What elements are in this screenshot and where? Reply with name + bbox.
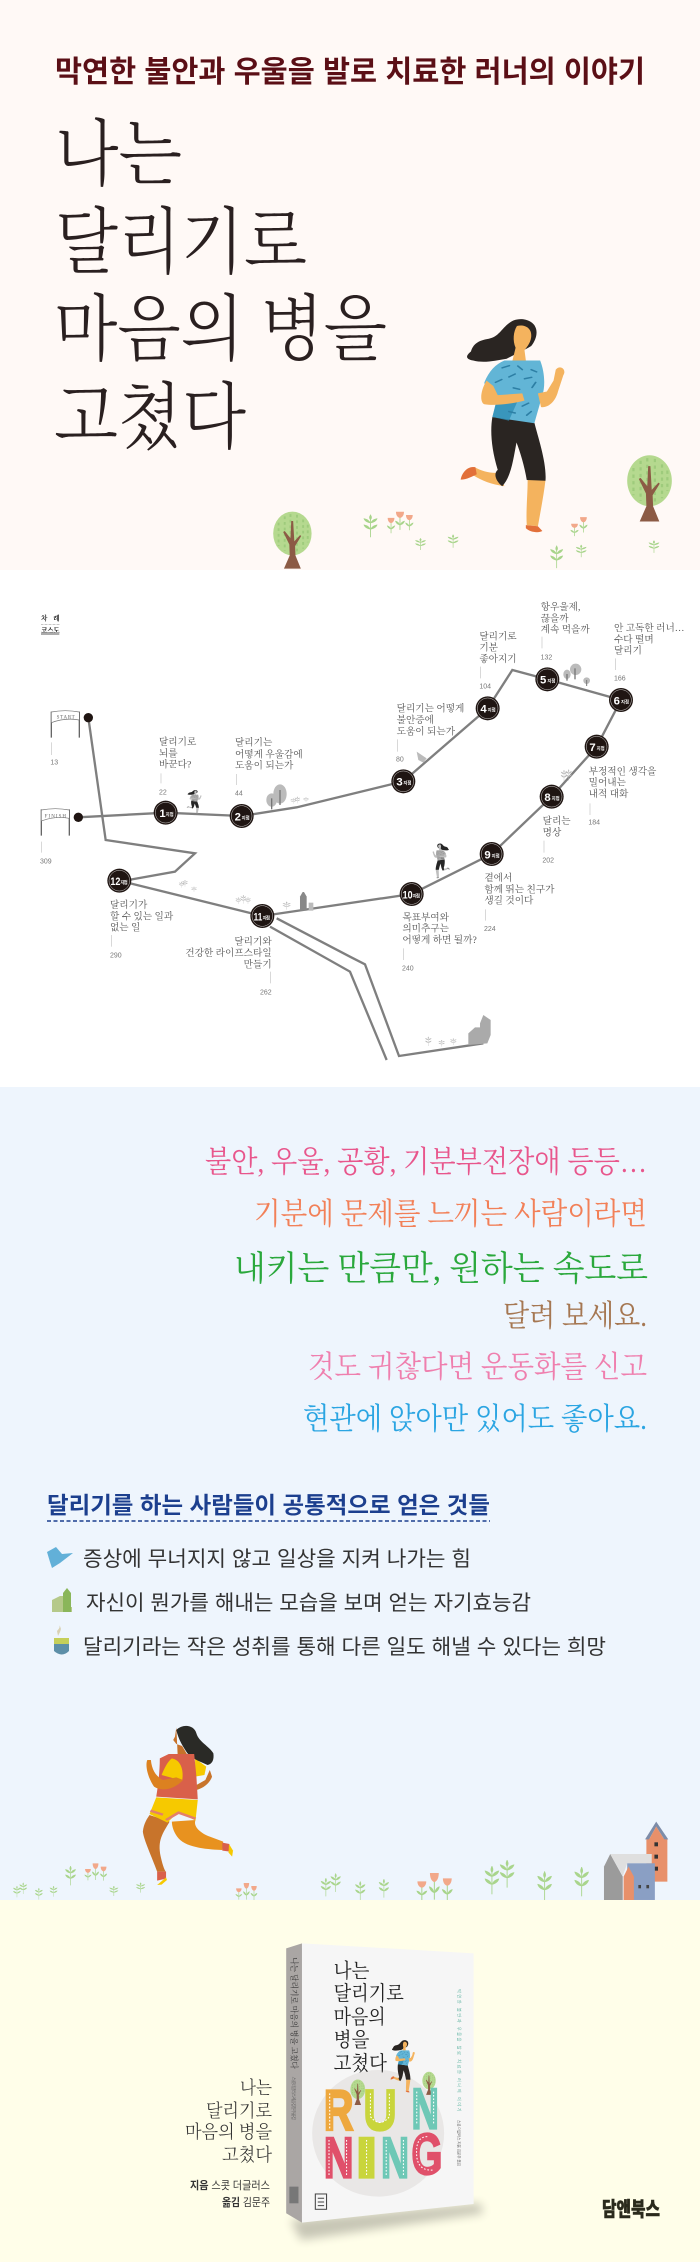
finish sign: FINISH [45, 814, 66, 819]
label 10: 어떻게 하면 될까? [402, 934, 477, 946]
checkpoint 11 [250, 904, 274, 928]
label 4: 104 [479, 683, 491, 690]
start sign: START [57, 716, 75, 721]
checkpoint 3: 지점 [403, 780, 411, 787]
publisher logo: 담앤북스 [602, 2198, 660, 2221]
book cover vertical tagline: 막연한 불안과 우울을 발로 치료한 러너의 이야기 [455, 1989, 463, 2112]
main title: 마음의 병을 [54, 290, 387, 370]
book title text: 고쳤다 [222, 2144, 273, 2165]
main title: 나는 [55, 115, 182, 195]
label 11: 건강한 라이프스타일 [185, 947, 272, 959]
encouragement text: 기분에 문제를 느끼는 사람이라면 [254, 1198, 647, 1231]
checkpoint 7: 7 [589, 742, 596, 754]
bullet 3 [54, 1625, 606, 1659]
checkpoint 4 [476, 696, 500, 720]
label 7 [588, 765, 657, 826]
checkpoint 9: 지점 [492, 852, 500, 859]
checkpoint 2: 2 [235, 811, 241, 823]
label 7: 내적 대화 [589, 788, 629, 800]
panel: message [0, 1087, 700, 1900]
label 12: 290 [110, 953, 122, 960]
checkpoint 9 [480, 842, 504, 866]
bullet 2: 자신이 뭔가를 해내는 모습을 보며 얻는 자기효능감 [86, 1592, 531, 1615]
book cover title [334, 1960, 404, 2075]
checkpoint 8 [540, 785, 564, 809]
label 9: 224 [484, 926, 496, 933]
main title: 달리기로 [55, 203, 307, 283]
checkpoint 10: 10 [403, 889, 413, 901]
label 8: 달리는 [543, 815, 571, 827]
label 3: 도움이 되는가 [397, 725, 456, 737]
label 2: 도움이 되는가 [235, 760, 294, 772]
RUNNING lettering: N [381, 2127, 409, 2190]
label 6 [614, 622, 684, 682]
RUNNING lettering: N [411, 2078, 439, 2141]
label 5: 132 [541, 655, 552, 662]
RUNNING lettering: G [411, 2123, 442, 2187]
encouragement text: 내키는 만큼만, 원하는 속도로 [234, 1250, 648, 1288]
author credits: 옮김 김문주 [222, 2196, 270, 2209]
label 4: 달리기로 [479, 630, 517, 642]
author credits [190, 2179, 270, 2209]
author credits: 지음 스콧 더글러스 [190, 2179, 270, 2192]
checkpoint 12 [107, 869, 131, 893]
label 1: 뇌를 [159, 747, 178, 759]
checkpoint 10 [400, 882, 424, 906]
encouragement text [205, 1146, 648, 1436]
finish sign: 309 [40, 858, 52, 865]
label 4: 기분 [479, 642, 499, 654]
label 7: 184 [588, 819, 600, 826]
label 9: 곁에서 [484, 872, 512, 884]
subtitle: 막연한 불안과 우울을 발로 치료한 러너의 이야기 [55, 56, 645, 89]
route line [78, 670, 621, 1060]
RUNNING lettering: N [324, 2127, 354, 2190]
RUNNING lettering: I [355, 2127, 379, 2190]
label 11 [185, 936, 272, 996]
checkpoint 2 [230, 804, 254, 828]
checkpoint 3: 3 [396, 777, 403, 789]
checkpoint 6: 6 [614, 695, 620, 707]
checkpoint 6 [609, 688, 633, 712]
encouragement text: 달려 보세요. [503, 1300, 647, 1333]
RUNNING lettering: U [363, 2079, 397, 2143]
label 11: 달리기와 [234, 936, 272, 948]
start sign [50, 711, 93, 767]
checkpoint 12: 12 [110, 876, 120, 888]
label 5: 계속 먹을까 [541, 624, 590, 636]
label 11: 262 [260, 989, 272, 996]
label 9: 함께 뛰는 친구가 [484, 883, 555, 895]
label 8 [542, 815, 571, 864]
book mockup [286, 1943, 483, 2240]
label 12 [110, 899, 174, 960]
label 8: 명상 [543, 826, 562, 838]
label 2: 달리기는 [235, 737, 273, 749]
label 10: 240 [402, 965, 414, 972]
panel: hero [0, 0, 700, 570]
label 1: 바꾼다? [159, 759, 191, 771]
checkpoint 1: 1 [159, 808, 166, 820]
label 5: 끊을까 [541, 612, 569, 624]
checkpoint 4: 지점 [488, 707, 496, 714]
label 4 [479, 630, 517, 690]
label 11: 만들기 [244, 958, 272, 970]
book title text: 달리기로 [206, 2101, 272, 2121]
illustration: meadow plants [13, 1860, 589, 1900]
start sign: 13 [50, 760, 58, 767]
label 6: 안 고독한 러너… [614, 622, 684, 634]
book spine text [289, 1957, 300, 2203]
illustration: village houses [604, 1822, 668, 1900]
panel: book footer [0, 1900, 700, 2262]
checkpoint 9: 9 [484, 849, 491, 861]
label 12: 달리기가 [110, 899, 148, 911]
book cover title: 마음의 [334, 2006, 386, 2028]
heading: contents: 차 례 [41, 614, 60, 623]
heading: contents: 코스도 [41, 627, 60, 635]
label 10: 목표부여와 [402, 911, 450, 923]
label 7: 부정적인 생각을 [589, 765, 657, 777]
panel: course map [0, 570, 700, 1087]
book cover runner [391, 2040, 415, 2092]
checkpoint 7: 지점 [597, 745, 605, 752]
book cover title: 고쳤다 [334, 2052, 387, 2075]
checkpoint 5: 지점 [547, 678, 555, 685]
checkpoint 12: 지점 [120, 879, 128, 886]
label 1 [159, 736, 197, 796]
label 9 [484, 872, 555, 933]
illustration: running woman in blue shirt [461, 319, 564, 532]
checkpoint 11: 11 [254, 911, 262, 923]
checkpoint 7 [585, 735, 609, 759]
label 6: 166 [614, 675, 626, 682]
main title [54, 115, 387, 458]
RUNNING lettering: R [324, 2079, 354, 2143]
book spine text: 나는 달리기로 마음의 병을 고쳤다 [289, 1957, 300, 2070]
book cover title: 달리기로 [334, 1982, 404, 2005]
gray map illustrations [179, 664, 590, 1047]
book title text: 마음의 병을 [185, 2121, 272, 2142]
label 1: 22 [159, 789, 167, 796]
label 12: 할 수 있는 일과 [110, 910, 174, 922]
book cover publisher mark [315, 2194, 327, 2209]
finish sign [40, 809, 83, 865]
label 12: 없는 일 [110, 922, 140, 934]
label 2 [235, 737, 303, 798]
label 2: 어떻게 우울감에 [235, 748, 303, 760]
label 3: 불안증에 [397, 714, 434, 726]
label 6: 수다 떨며 [614, 633, 654, 645]
book title text [185, 2078, 273, 2165]
checkpoint 8: 지점 [552, 795, 560, 802]
label 4: 좋아지기 [479, 653, 517, 665]
heading: shared gains: 달리기를 하는 사람들이 공통적으로 얻은 것들 [47, 1492, 490, 1518]
label 7: 밀어내는 [589, 777, 627, 789]
checkpoint 5 [535, 667, 559, 691]
checkpoint 2: 지점 [242, 814, 250, 821]
checkpoint 10: 지점 [413, 892, 420, 899]
label 1: 달리기로 [159, 736, 197, 748]
checkpoint 5: 5 [540, 675, 546, 687]
label 9: 생길 것이다 [484, 895, 534, 907]
RUNNING stitching [329, 2092, 434, 2175]
encouragement text: 현관에 앉아만 있어도 좋아요. [303, 1403, 647, 1436]
label 3 [396, 703, 464, 763]
RUNNING lettering [324, 2078, 442, 2190]
book spine text: 스콧 더글러스 지음 김문주 옮김 [290, 2077, 297, 2120]
illustration: trees and plants [273, 455, 672, 569]
label 10: 의미추구는 [402, 923, 450, 935]
checkpoint 6: 지점 [621, 698, 629, 705]
label 2: 44 [235, 791, 243, 798]
checkpoint 8: 8 [544, 792, 551, 804]
label 6: 달리기 [614, 645, 642, 657]
label 5: 항우울제, [541, 601, 580, 613]
checkpoint 3 [391, 769, 415, 793]
checkpoint 1 [154, 801, 178, 825]
book cover vertical tagline: 스콧 더글러스 지음 김문주 옮김 [456, 2120, 462, 2166]
book cover vertical tagline [455, 1989, 463, 2166]
heading: contents [41, 614, 60, 635]
label 3: 80 [396, 756, 404, 763]
label 10 [402, 911, 477, 972]
label 8: 202 [542, 857, 554, 864]
encouragement text: 것도 귀찮다면 운동화를 신고 [308, 1351, 647, 1384]
bullet 1: 증상에 무너지지 않고 일상을 지켜 나가는 힘 [83, 1548, 471, 1571]
main title: 고쳤다 [54, 378, 246, 458]
bullet 3: 달리기라는 작은 성취를 통해 다른 일도 해낼 수 있다는 희망 [83, 1636, 606, 1659]
checkpoint 1: 지점 [166, 811, 174, 818]
encouragement text: 불안, 우울, 공황, 기분부전장애 등등… [205, 1146, 647, 1179]
label 5 [541, 601, 590, 662]
illustration: running woman in red and yellow [143, 1726, 233, 1885]
book cover title: 병을 [334, 2029, 370, 2052]
label 3: 달리기는 어떻게 [397, 703, 464, 715]
checkpoint 4: 4 [480, 704, 487, 716]
book title text: 나는 [240, 2078, 272, 2098]
book cover trees [350, 2072, 436, 2105]
checkpoint 11: 지점 [263, 914, 270, 921]
book cover title: 나는 [334, 1960, 370, 1982]
